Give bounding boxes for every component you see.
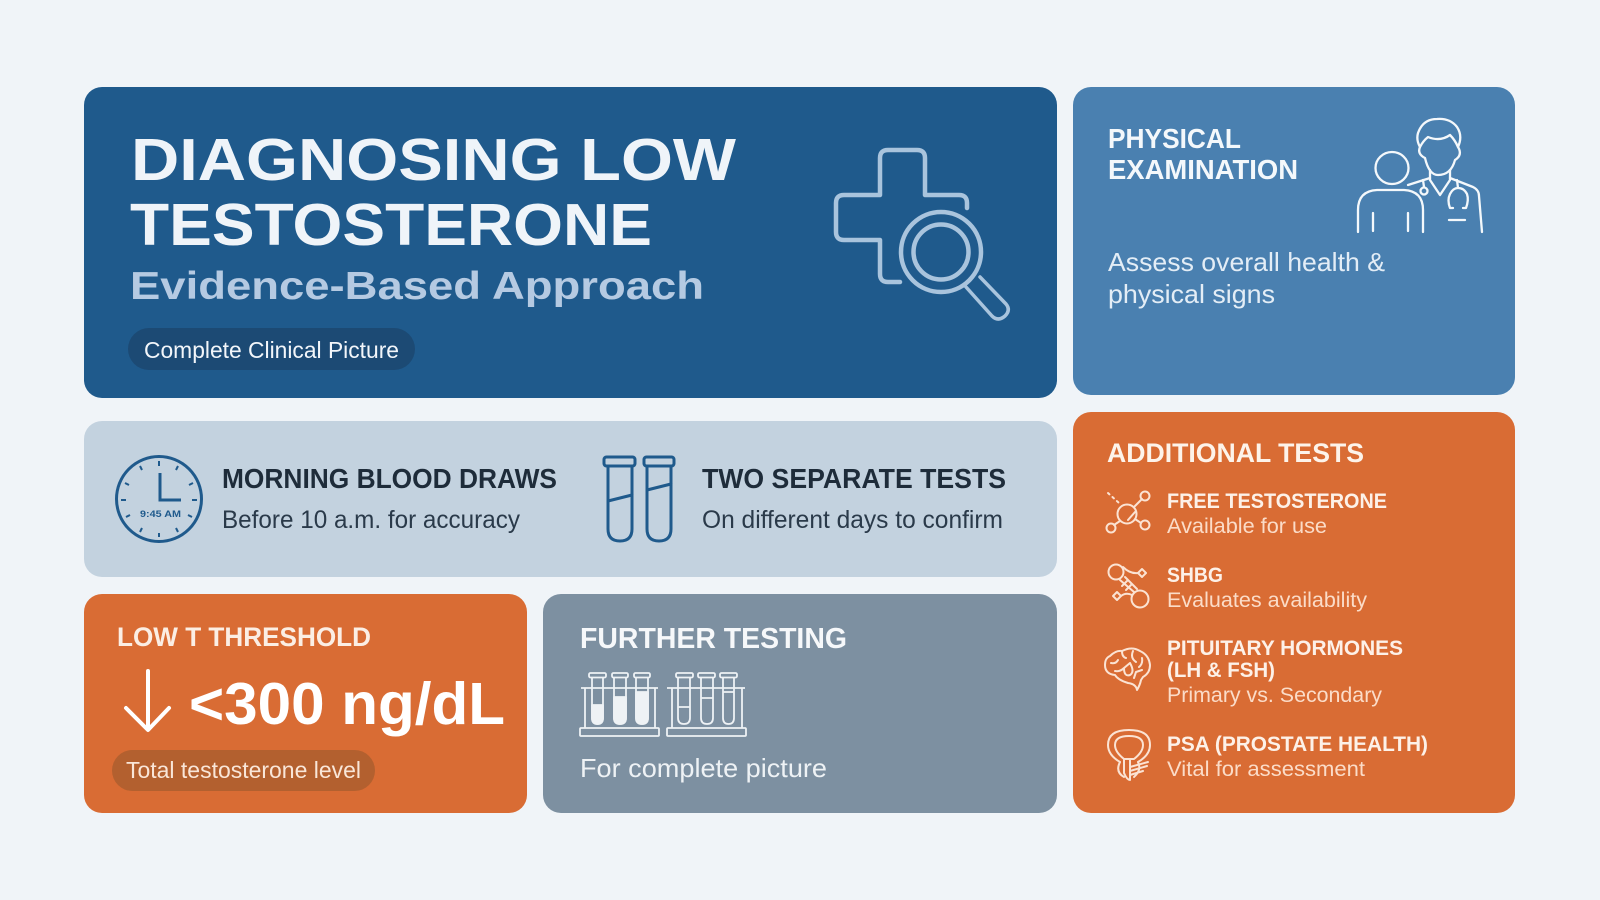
item: PSA: PSA (PROSTATE HEALTH) (1167, 733, 1428, 756)
icon: medical cross with magnifying glass (836, 150, 1008, 319)
heading: physical examination: PHYSICAL (1108, 123, 1241, 154)
text: physical examination description: Assess overall health & (1108, 247, 1385, 277)
title: DIAGNOSING LOW (131, 127, 736, 193)
panel: additional tests (1073, 412, 1515, 813)
text: morning blood draws: Before 10 a.m. for accuracy (222, 506, 520, 534)
item: SHBG (1108, 564, 1368, 612)
text: physical examination description (1108, 247, 1385, 309)
badge: total testosterone level (112, 750, 375, 791)
icon: filled test tube rack (580, 673, 659, 736)
icon: down arrow (126, 671, 169, 730)
text: morning blood draws: MORNING BLOOD DRAWS (222, 463, 557, 494)
item: pituitary hormones (1105, 637, 1403, 707)
icon: doctor and patient (1358, 119, 1482, 232)
heading: physical examination (1108, 123, 1298, 185)
item: pituitary hormones: Primary vs. Secondary (1167, 684, 1383, 707)
icon: clock at 9:45 AM: 9:45 AM (140, 509, 181, 520)
icon: binding protein (1108, 564, 1148, 608)
heading: physical examination: EXAMINATION (1108, 154, 1298, 185)
item: SHBG: SHBG (1167, 564, 1223, 587)
badge: complete clinical picture: Complete Clinical Picture (144, 337, 399, 363)
badge: total testosterone level: Total testosterone level (126, 757, 361, 783)
item: free testosterone (1106, 490, 1387, 538)
icon: molecule (1106, 492, 1150, 532)
icon: clock at 9:45 AM (116, 456, 202, 542)
text: for complete picture: For complete picture (580, 753, 827, 783)
badge: complete clinical picture (128, 328, 415, 370)
item: PSA (1108, 730, 1428, 781)
item: pituitary hormones: PITUITARY HORMONES (1167, 637, 1403, 660)
panel: low T threshold (84, 594, 527, 813)
subtitle: Evidence-Based Approach (130, 265, 704, 308)
icon: brain (1105, 648, 1150, 690)
panel: further testing (543, 594, 1057, 813)
panel: physical examination (1073, 87, 1515, 395)
icon: prostate (1108, 730, 1150, 780)
item: free testosterone: Available for use (1167, 515, 1327, 538)
text: physical examination description: physical signs (1108, 279, 1275, 309)
item: SHBG: Evaluates availability (1167, 589, 1368, 612)
icon: empty test tube rack (667, 673, 746, 736)
heading: additional tests: ADDITIONAL TESTS (1107, 438, 1364, 468)
stat: threshold value: <300 ng/dL (189, 671, 505, 737)
item: PSA: Vital for assessment (1167, 758, 1365, 781)
item: free testosterone: FREE TESTOSTERONE (1167, 490, 1387, 513)
icon: two test tubes (604, 457, 674, 541)
text: two separate tests: On different days to confirm (702, 506, 1003, 534)
title: TESTOSTERONE (130, 192, 652, 258)
heading: low T threshold: LOW T THRESHOLD (117, 622, 371, 652)
panel: morning blood draws and two separate tests (84, 421, 1057, 577)
text: two separate tests (702, 463, 1006, 534)
text: morning blood draws (222, 463, 557, 534)
heading: further testing: FURTHER TESTING (580, 623, 847, 655)
item: pituitary hormones: (LH & FSH) (1167, 659, 1275, 682)
title (130, 127, 736, 258)
text: two separate tests: TWO SEPARATE TESTS (702, 463, 1006, 494)
panel: hero title (84, 87, 1057, 398)
